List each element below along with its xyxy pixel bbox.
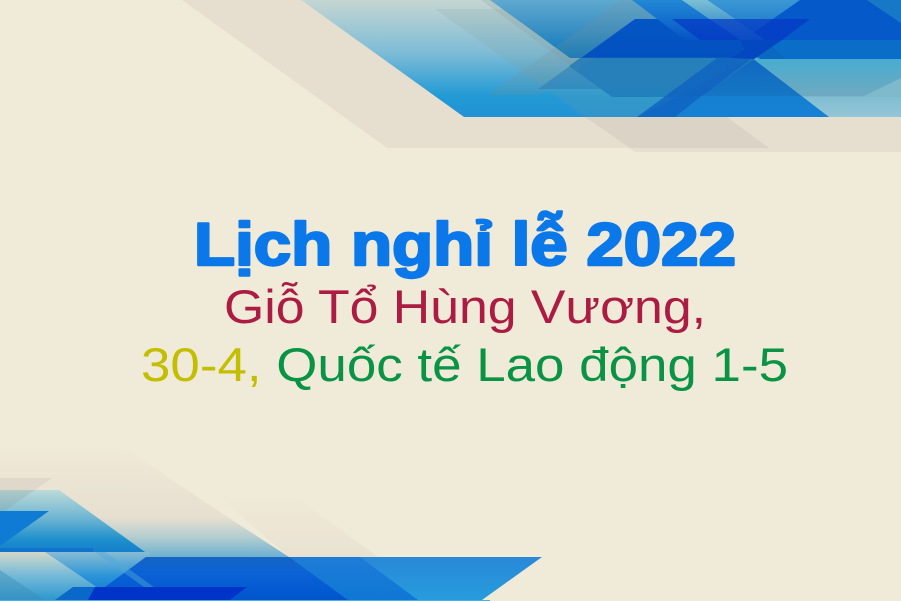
title: Lịch nghỉ lễ 2022 (194, 211, 736, 278)
subtitle line 1: Giỗ Tổ Hùng Vương, (224, 280, 706, 333)
bottom-left decorative shapes (0, 443, 542, 601)
subtitle line 2: 30-4, Quốc tế Lao động 1-5 (141, 338, 788, 391)
top-right decorative shapes (182, 0, 901, 152)
